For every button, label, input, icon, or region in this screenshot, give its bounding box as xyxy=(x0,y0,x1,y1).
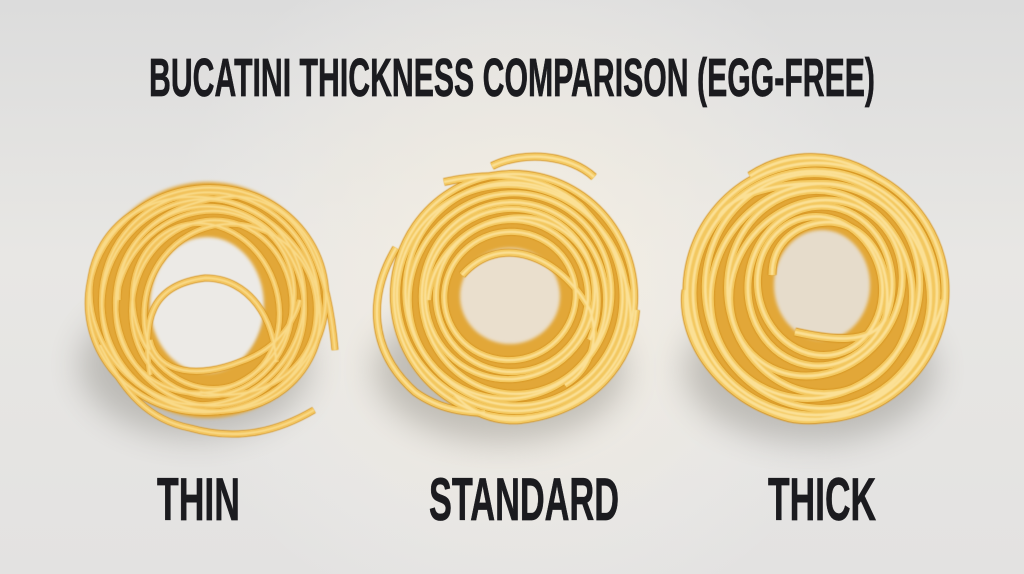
pasta nest: thick xyxy=(648,126,982,460)
pasta nest: thin xyxy=(52,157,358,451)
label: standard: STANDARD xyxy=(429,466,619,533)
pasta nest: standard xyxy=(356,143,668,453)
label: thick: THICK xyxy=(768,466,876,533)
label: thin: THIN xyxy=(157,466,240,533)
